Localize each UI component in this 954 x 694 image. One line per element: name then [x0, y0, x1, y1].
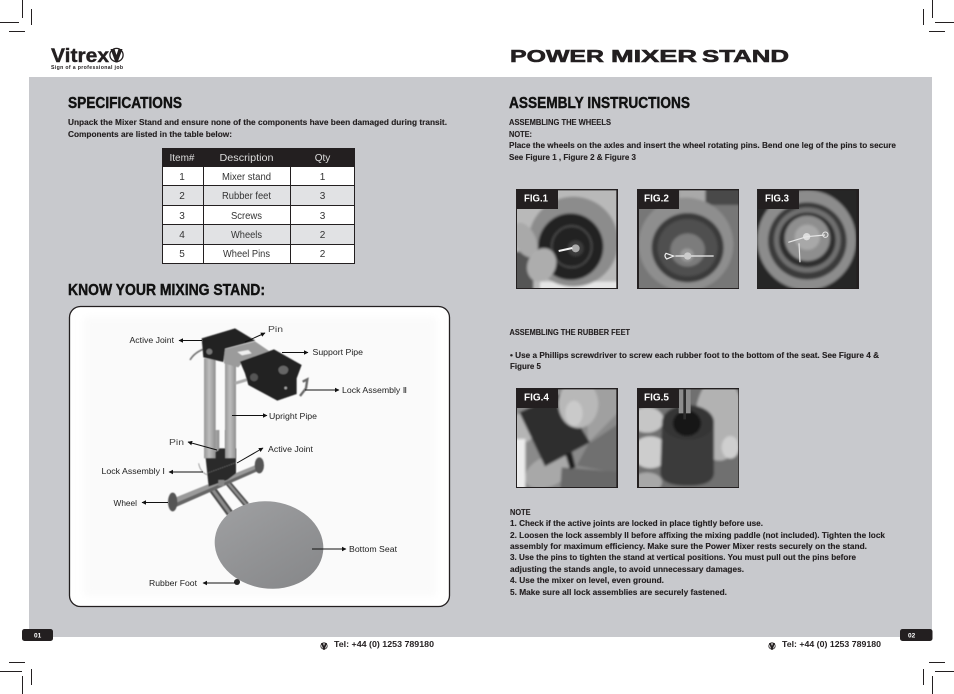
- table: components: Rubber feet: [222, 191, 271, 202]
- stand seat: [209, 494, 329, 596]
- text block: assembling the wheels: NOTE:: [509, 129, 532, 139]
- text block: assembling the rubber feet: ASSEMBLING THE RUBBER FEET: [510, 327, 631, 337]
- stand head: [190, 328, 307, 458]
- text block: assembling the rubber feet: [510, 327, 879, 371]
- text block: assembling the rubber feet: Figure 5: [510, 361, 541, 371]
- callout labels: Rubber Foot: [149, 578, 198, 588]
- callout labels: Support Pipe: [312, 347, 363, 357]
- callout labels: Pin: [169, 437, 184, 447]
- footer: telephone left: Tel: +44 (0) 1253 789180: [334, 639, 434, 649]
- table: components: 2: [179, 191, 185, 202]
- footer: telephone right: Tel: +44 (0) 1253 789180: [782, 639, 881, 649]
- table: components: Wheels: [231, 230, 262, 241]
- table: components: 3: [320, 211, 326, 222]
- label: fig 3: FIG.3: [765, 193, 789, 205]
- text block: note: 3. Use the pins to tighten the stand at vertical positions. You must pull out the pins before: [510, 552, 856, 562]
- icon: Vitrex emblem: [110, 48, 123, 62]
- text block: assembling the wheels: [509, 117, 896, 162]
- heading: know your mixing stand: KNOW YOUR MIXING STAND:: [68, 282, 265, 299]
- table: components: 4: [179, 230, 185, 241]
- page tab: 02: 02: [908, 632, 916, 640]
- table header: Description: [220, 153, 274, 164]
- table: components: [162, 148, 355, 264]
- title: Power Mixer Stand: [510, 46, 789, 66]
- text block: note: 4. Use the mixer on level, even ground.: [510, 575, 664, 585]
- page tab: 01: 01: [34, 632, 42, 640]
- label: fig 4: FIG.4: [524, 392, 549, 404]
- callout labels: Upright Pipe: [269, 411, 317, 421]
- table: components: 2: [320, 249, 326, 260]
- table: components: 3: [320, 191, 326, 202]
- panel: stand diagram: [70, 306, 450, 606]
- label: fig 5: FIG.5: [644, 392, 669, 404]
- callout labels: [102, 324, 407, 588]
- callout labels: Pin: [268, 324, 283, 334]
- table: components: 2: [320, 230, 326, 241]
- label: fig 2: FIG.2: [644, 193, 669, 205]
- table: components: 1: [320, 172, 326, 183]
- title: Power Mixer Stand: MIXER: [611, 46, 698, 66]
- title: Power Mixer Stand: POWER: [510, 46, 604, 66]
- table header: Item#: [169, 153, 195, 164]
- illustration: mixing stand: [168, 328, 329, 596]
- page tab: 02: [900, 629, 932, 641]
- text block: specifications intro: Unpack the Mixer Stand and ensure none of the components have been damaged during transit.: [68, 117, 447, 127]
- text block: assembling the wheels: ASSEMBLING THE WHEELS: [509, 117, 611, 127]
- text block: assembling the wheels: See Figure 1 , Figure 2 & Figure 3: [509, 152, 636, 162]
- table header: Qty: [315, 153, 330, 164]
- callout labels: Active Joint: [268, 444, 314, 454]
- callout labels: Active Joint: [130, 335, 175, 345]
- stand base: [168, 430, 264, 513]
- label: fig 1: FIG.1: [524, 193, 548, 205]
- page tab: 01: [22, 629, 53, 641]
- text block: note: adjusting the stands angle, to avoid unnecessary damages.: [510, 564, 744, 574]
- text block: note: 2. Loosen the lock assembly II before affixing the mixing paddle (not included). Tighten the lock: [510, 530, 885, 540]
- background panel: [29, 77, 932, 637]
- text block: assembling the wheels: Place the wheels on the axles and insert the wheel rotating pins. Bend one leg of the pins to secure: [509, 140, 896, 150]
- arrows: [142, 333, 346, 583]
- figure 5: [637, 388, 739, 488]
- table: components: Mixer stand: [222, 172, 271, 183]
- text block: note: [510, 507, 885, 597]
- text block: note: 1. Check if the active joints are locked in place tightly before use.: [510, 518, 763, 528]
- figure 3: [757, 189, 859, 289]
- logo: Vitrex: Vitrex: [51, 46, 109, 67]
- table: components: 3: [179, 211, 185, 222]
- callout labels: Lock Assembly Ⅱ: [342, 385, 407, 395]
- table: components: 1: [179, 172, 185, 183]
- callout labels: Lock Assembly Ⅰ: [102, 466, 165, 476]
- table header: [162, 148, 355, 167]
- callout labels: Wheel: [114, 498, 137, 508]
- figure 1: [516, 189, 618, 289]
- heading: specifications: SPECIFICATIONS: [68, 95, 182, 112]
- title: Power Mixer Stand: STAND: [702, 46, 789, 66]
- heading: assembly instructions: ASSEMBLY INSTRUCTIONS: [509, 95, 690, 112]
- logo: Vitrex: Sign of a professional job: [51, 65, 123, 71]
- callout labels: Bottom Seat: [349, 544, 398, 554]
- rubber foot: [234, 579, 240, 585]
- logo: Vitrex: [51, 46, 123, 71]
- text block: assembling the rubber feet: • Use a Phillips screwdriver to screw each rubber foot to the bottom of the seat. See Figure 4 &: [510, 350, 879, 360]
- text block: note: 5. Make sure all lock assemblies are securely fastened.: [510, 587, 727, 597]
- text block: specifications intro: Components are listed in the table below:: [68, 129, 232, 139]
- table: components: Wheel Pins: [223, 249, 270, 260]
- table: components: 5: [179, 249, 185, 260]
- figure 2: [637, 189, 739, 289]
- text block: note: assembly for maximum efficiency. Make sure the Power Mixer rests securely on the stand.: [510, 541, 867, 551]
- text block: note: NOTE: [510, 507, 531, 517]
- text block: specifications intro: [68, 117, 447, 139]
- table: components: Screws: [231, 211, 262, 222]
- figure 4: [516, 388, 618, 488]
